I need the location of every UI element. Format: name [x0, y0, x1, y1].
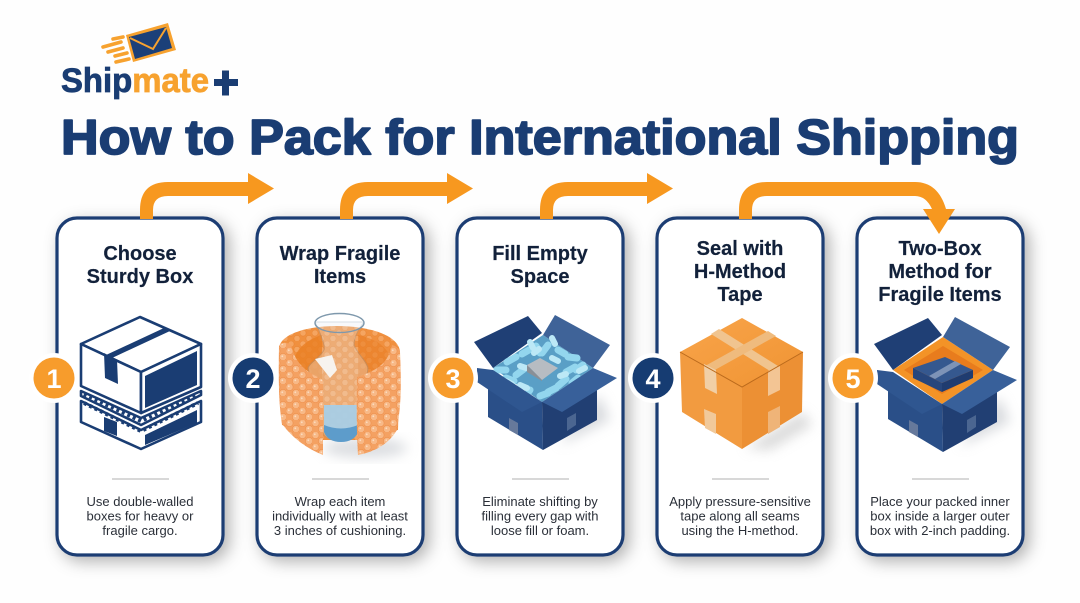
illustration: box within a box [874, 317, 1017, 452]
caption: boxes for heavy or [87, 508, 194, 524]
card frame [857, 218, 1023, 555]
caption: filling every gap with [481, 508, 599, 524]
caption: Wrap each item [295, 494, 385, 509]
badge 5 [828, 353, 878, 403]
card 2: Wrap Fragile Items [228, 218, 423, 555]
heading: Seal with [697, 238, 783, 260]
arrow 1 to 2 [140, 173, 274, 219]
heading: H-Method [694, 261, 786, 283]
badge 3 [428, 353, 478, 403]
illustration: orange box with H-tape [680, 318, 812, 450]
badge 3: 3 [445, 364, 461, 394]
heading: Space [511, 266, 569, 288]
divider [312, 478, 369, 480]
caption: box inside a larger outer [870, 508, 1010, 524]
packing peanuts [497, 338, 585, 396]
badge 2 [228, 353, 278, 403]
caption: Eliminate shifting by [482, 494, 598, 509]
heading: Fill Empty [492, 243, 589, 265]
icon: corrugated box [81, 317, 201, 449]
card frame [657, 218, 823, 555]
heading: Items [314, 266, 366, 288]
metal item [527, 358, 558, 380]
card 3: Fill Empty Space [428, 218, 623, 555]
caption: Use double-walled [87, 494, 193, 509]
heading: Tape [717, 284, 763, 306]
caption: individually with at least [272, 508, 408, 524]
caption: box with 2-inch padding. [870, 523, 1010, 538]
card frame [57, 218, 223, 555]
divider [512, 478, 569, 480]
badge 4 [628, 353, 678, 403]
arrow 3 to 4 [540, 173, 673, 219]
heading: Choose [103, 243, 177, 265]
icon: flying envelope [103, 23, 176, 62]
card frame [457, 218, 623, 555]
illustration: open box with packing peanuts [474, 315, 617, 450]
heading: Fragile Items [878, 284, 1002, 306]
card 1: Choose Sturdy Box [29, 218, 223, 555]
caption: tape along all seams [680, 508, 800, 524]
divider [712, 478, 769, 480]
divider [912, 478, 969, 480]
heading: Sturdy Box [87, 266, 193, 288]
heading: Method for [888, 261, 992, 283]
logo: Shipmate+ [61, 23, 238, 100]
arrow 2 to 3 [340, 173, 473, 219]
badge 2: 2 [245, 364, 261, 394]
badge 1: 1 [46, 364, 62, 394]
heading: Wrap Fragile [280, 243, 400, 265]
illustration: vase in bubble wrap [279, 314, 407, 458]
card frame [257, 218, 423, 555]
wordmark: Shipmate [61, 62, 209, 100]
icon: plus [214, 70, 238, 96]
divider [112, 478, 169, 480]
card 4: Seal with H-Method Tape [628, 218, 823, 555]
badge 4: 4 [645, 364, 661, 394]
badge 5: 5 [845, 364, 861, 394]
badge 1 [29, 353, 79, 403]
caption: using the H-method. [681, 523, 799, 538]
caption: 3 inches of cushioning. [274, 523, 406, 538]
caption: Place your packed inner [870, 494, 1010, 509]
arrow 4 to 5 [739, 182, 955, 234]
caption: loose fill or foam. [491, 523, 589, 538]
caption: Apply pressure-sensitive [669, 494, 811, 509]
caption: fragile cargo. [102, 523, 178, 538]
card 5: Two-Box Method [828, 218, 1023, 555]
heading: Two-Box [899, 238, 981, 260]
title: How to Pack for International Shipping [61, 110, 1019, 165]
